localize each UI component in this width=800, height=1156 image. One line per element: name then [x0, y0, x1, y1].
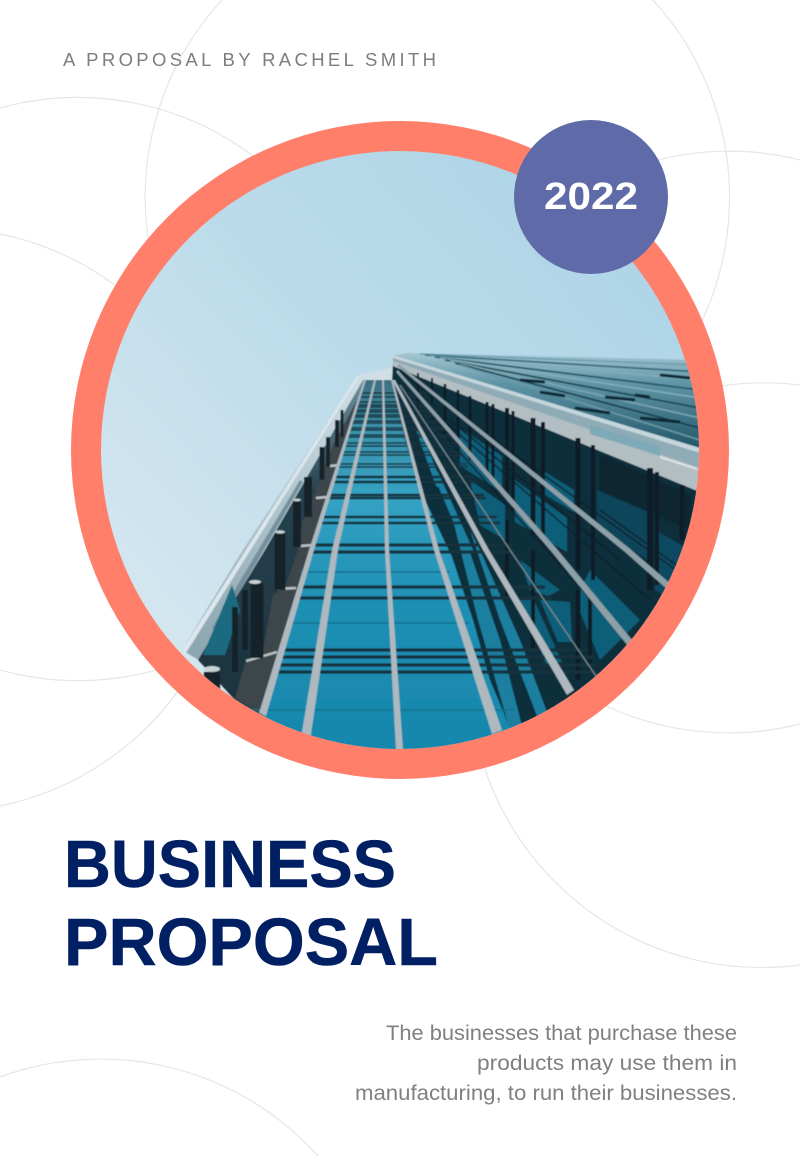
light window mullions	[259, 380, 574, 750]
year badge	[514, 120, 668, 274]
description	[355, 1021, 737, 1105]
roof	[393, 353, 700, 452]
photo: skyscraper against sky	[100, 150, 700, 760]
byline: A PROPOSAL BY RACHEL SMITH	[63, 49, 436, 70]
description: products may use them in	[477, 1051, 737, 1075]
year badge: 2022	[544, 176, 638, 218]
dark reflection on glass	[392, 362, 700, 735]
diagonal light bands on the side wing	[396, 364, 672, 646]
left floor slabs	[235, 400, 357, 713]
left recess	[198, 380, 366, 716]
front glass facade	[262, 380, 510, 749]
pane dividers	[250, 572, 515, 710]
title: BUSINESS	[64, 827, 396, 902]
roof edge band	[393, 355, 700, 492]
roof shadow marks	[520, 375, 690, 422]
sky	[100, 150, 700, 750]
horizontal transoms	[337, 393, 468, 467]
title: PROPOSAL	[64, 905, 438, 980]
building	[182, 353, 700, 760]
top railing and left ledge	[182, 367, 393, 662]
title	[64, 827, 438, 980]
column caps	[204, 499, 301, 672]
left columns	[212, 410, 342, 690]
reflected teal stripes	[416, 430, 547, 730]
dark vertical columns	[418, 373, 682, 680]
roof stripes	[420, 354, 700, 440]
description: The businesses that purchase these	[386, 1021, 737, 1045]
thin dark panel diagonals	[402, 373, 676, 604]
coral ring	[71, 121, 729, 779]
side wing glass panels	[460, 428, 640, 664]
description: manufacturing, to run their businesses.	[355, 1081, 737, 1105]
